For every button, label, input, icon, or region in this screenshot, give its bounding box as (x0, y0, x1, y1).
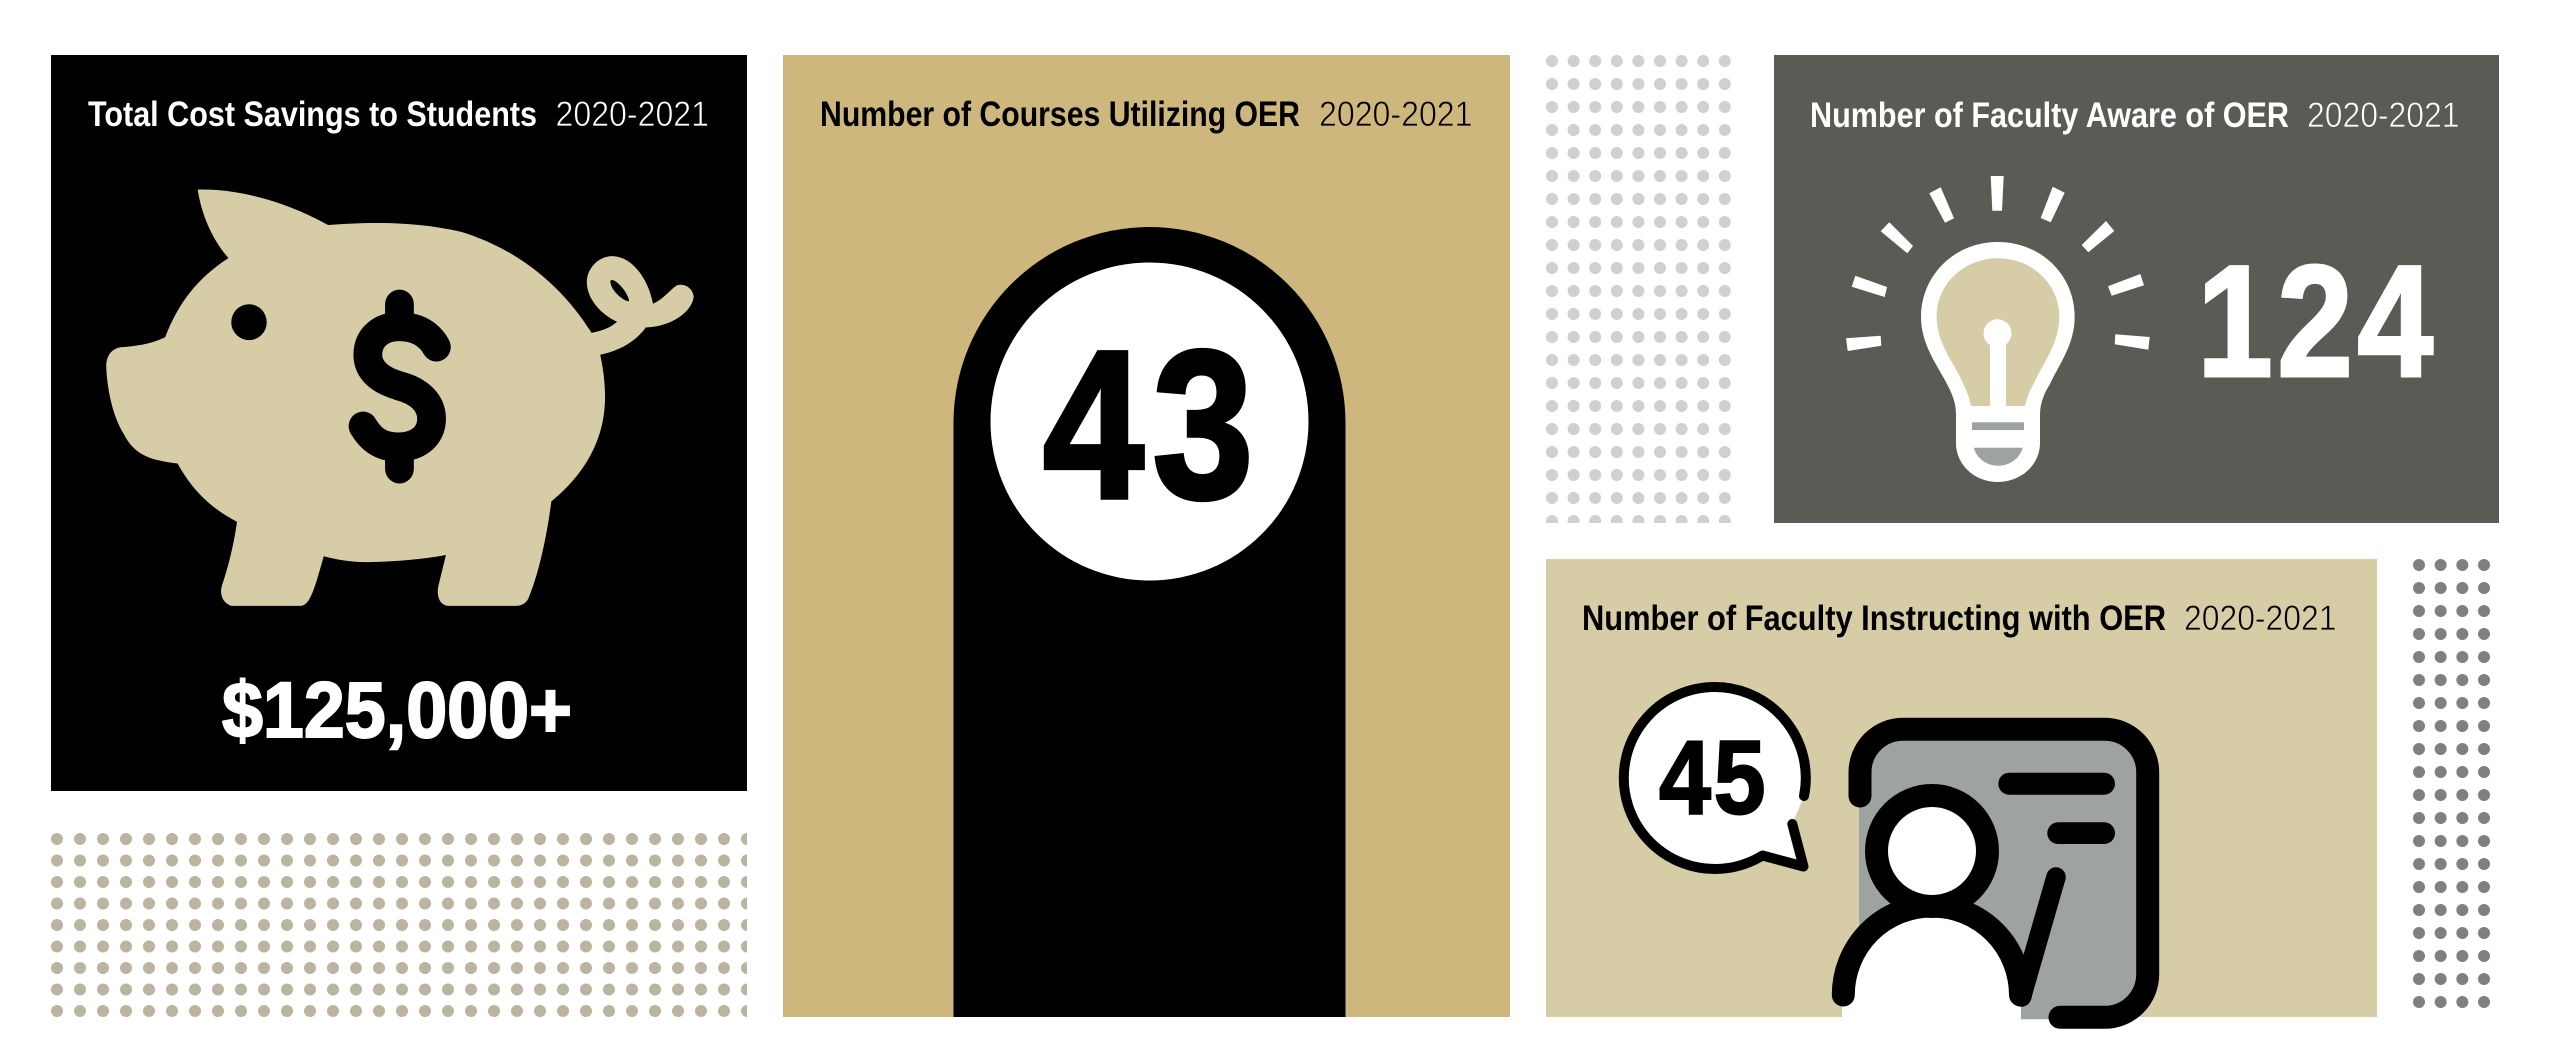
arch column (954, 227, 1346, 1017)
panel: total cost savings (51, 55, 747, 791)
date: 2020-2021: 2020-2021 (2184, 599, 2336, 638)
date: 2020-2021: 2020-2021 (556, 95, 709, 134)
speech bubble: 45 (1624, 687, 1806, 869)
date: 2020-2021: 2020-2021 (2307, 96, 2460, 135)
icon: light bulb with rays (1846, 176, 2150, 482)
speech bubble: 45: 45 (1659, 719, 1768, 837)
icon: presenter at board (1842, 729, 2148, 1030)
dot pattern: dark grey right of faculty instructing panel (2419, 565, 2490, 1002)
value circle: 43 (990, 262, 1308, 580)
dot pattern: light grey beside faculty aware panel (1552, 61, 1735, 521)
panel: courses utilizing OER (783, 55, 1510, 1017)
date: 2020-2021: 2020-2021 (1319, 95, 1472, 134)
panel: faculty instructing with OER (1546, 559, 2377, 1030)
heading: faculty aware of OER: Number of Faculty Aware of OER (1810, 96, 2289, 135)
dot pattern: tan under savings panel (57, 839, 770, 1011)
value: 124: 124 (2197, 233, 2437, 410)
value: $125,000+: $125,000+ (222, 665, 572, 754)
heading: courses utilizing OER: Number of Courses Utilizing OER (820, 95, 1300, 134)
icon: piggy bank (106, 190, 694, 606)
heading: total cost savings: Total Cost Savings to Students (88, 95, 537, 134)
panel: faculty aware of OER (1774, 55, 2499, 523)
value circle: 43: 43 (1043, 307, 1262, 543)
heading: faculty instructing with OER: Number of Faculty Instructing with OER (1582, 599, 2166, 638)
